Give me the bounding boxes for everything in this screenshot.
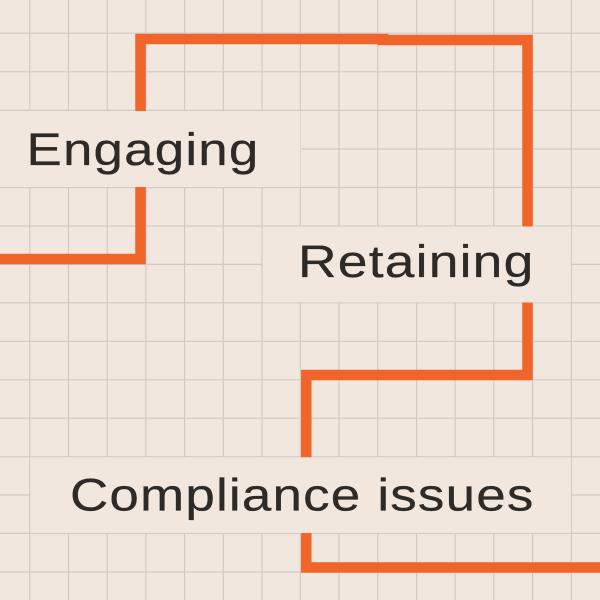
label: Compliance issues	[30, 457, 571, 533]
label: Engaging: Engaging	[26, 124, 260, 175]
label: Compliance issues: Compliance issues	[70, 470, 534, 520]
label: Engaging	[0, 111, 300, 187]
label: Retaining: Retaining	[298, 236, 534, 287]
label: Retaining	[262, 226, 571, 302]
